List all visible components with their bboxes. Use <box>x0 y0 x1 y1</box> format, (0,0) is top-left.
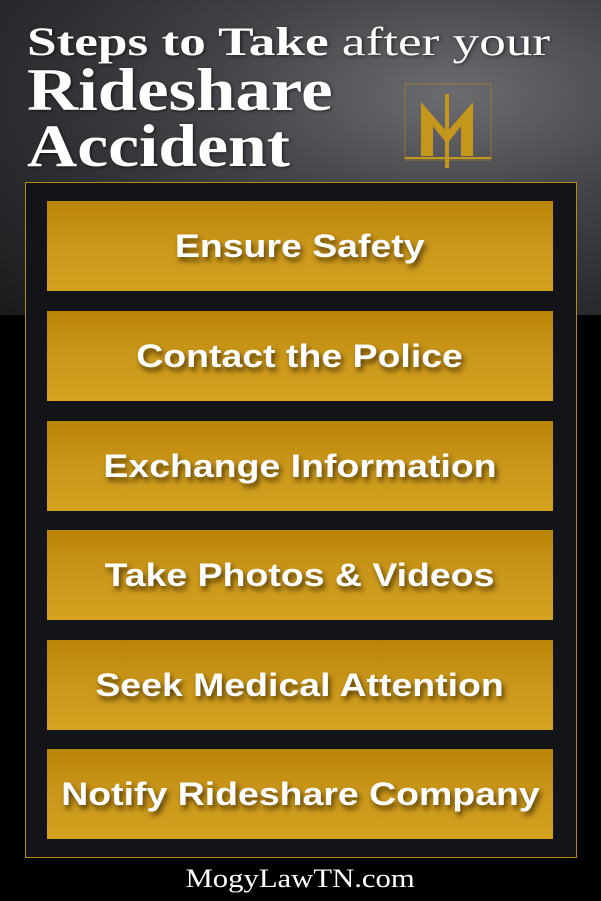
title <box>27 19 552 179</box>
background photo <box>0 0 601 315</box>
step 1 <box>47 201 553 291</box>
step 6 <box>47 749 553 839</box>
footer url: MogyLawTN.com <box>186 864 415 893</box>
step 2 <box>47 311 553 401</box>
step 3: Exchange Information <box>103 448 497 484</box>
step 2: Contact the Police <box>137 338 463 374</box>
panel: steps <box>25 182 577 858</box>
title: Accident <box>27 113 290 179</box>
step 4: Take Photos & Videos <box>105 556 495 592</box>
title: Rideshare <box>27 57 333 123</box>
step 4 <box>47 530 553 620</box>
step 5: Seek Medical Attention <box>96 666 504 702</box>
step 6: Notify Rideshare Company <box>61 776 539 812</box>
title: Steps to Take after your <box>27 19 550 64</box>
step 1: Ensure Safety <box>175 228 425 264</box>
icon: logo <box>404 84 492 168</box>
step 3 <box>47 421 553 511</box>
step 5 <box>47 640 553 730</box>
